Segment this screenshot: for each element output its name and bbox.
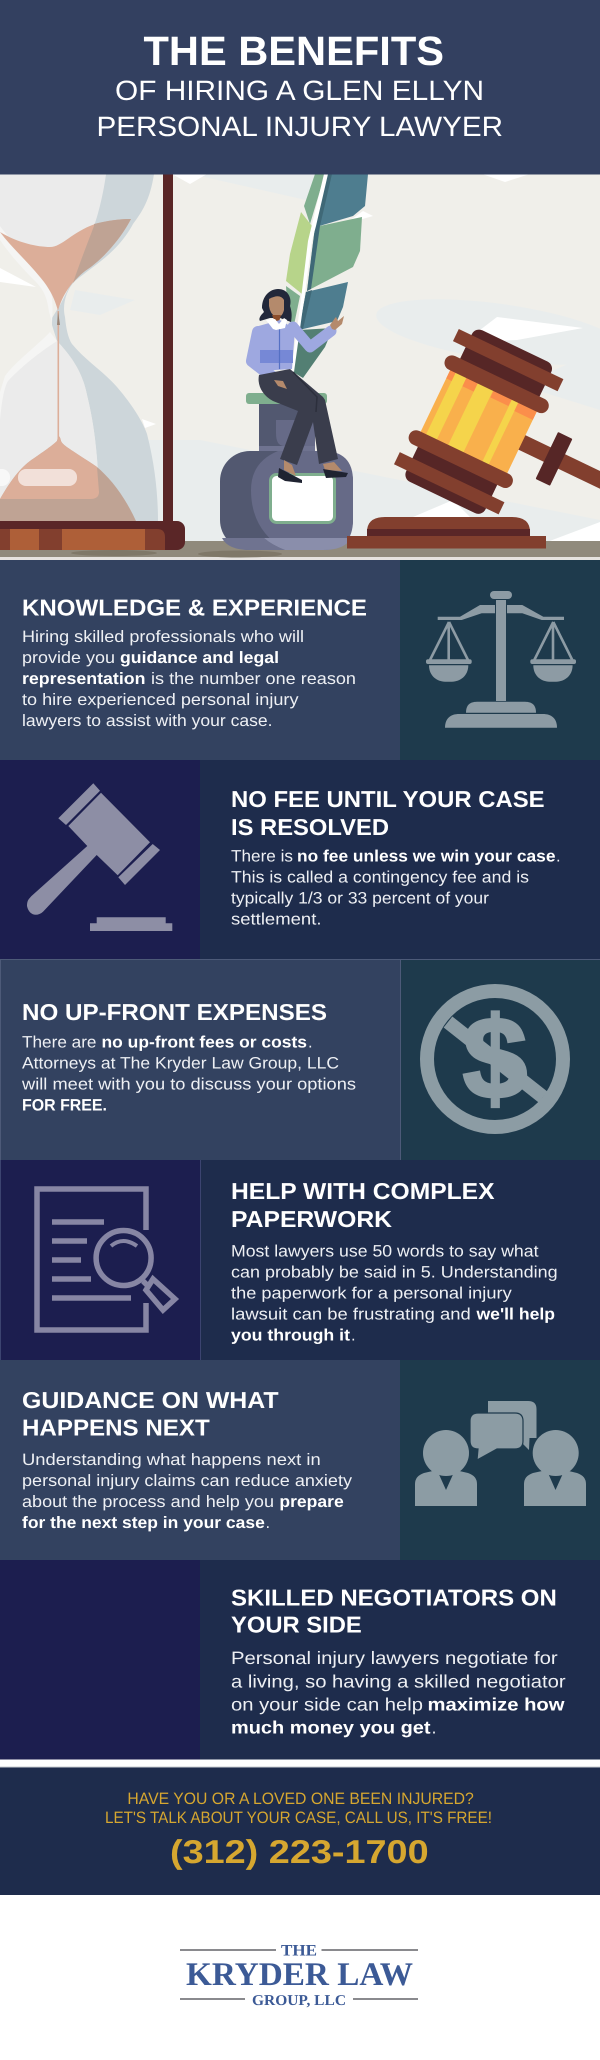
heading: YOUR SIDE [231,1612,362,1638]
heading: SKILLED NEGOTIATORS ON [231,1585,557,1611]
phone number: (312) 223-1700 [170,1833,429,1870]
body text: Most lawyers use 50 words to say what [231,1243,539,1261]
body text: . [432,1717,437,1737]
wooden gavel [347,321,600,564]
icon: two people talking [415,1401,586,1506]
heading: HELP WITH COMPLEX [231,1178,495,1204]
floor [0,541,600,557]
body text: . [266,1514,270,1532]
body text: maximize how [428,1694,566,1714]
body text: no fee unless we win your case [297,848,556,866]
hourglass top sand [0,219,131,311]
icon: no dollar sign [427,991,563,1127]
body text: guidance and legal [120,649,279,667]
heading: HAPPENS NEXT [22,1415,210,1441]
body text: a living, so having a skilled negotiator [231,1671,566,1691]
body text: . [556,848,561,866]
hourglass frame [163,174,173,524]
heading: PAPERWORK [231,1206,392,1232]
heading [231,1585,557,1638]
body text: can probably be said in 5. Understanding [231,1264,558,1282]
body text: . [351,1327,356,1345]
body text: personal injury claims can reduce anxiety [22,1472,353,1490]
body text: for the next step in your case [22,1514,265,1532]
heading: NO FEE UNTIL YOUR CASE [231,786,545,812]
title: THE BENEFITS [144,28,444,74]
logo: The Kryder Law Group, LLC: GROUP, LLC [252,1993,346,2009]
illustration: hourglass, feather figure and gavel [0,174,600,564]
body text: settlement. [231,911,322,929]
body text: no up-front fees or costs [102,1034,307,1052]
body text: will meet with you to discuss your options [21,1076,356,1094]
body text [21,1034,356,1115]
subtitle line two: PERSONAL INJURY LAWYER [96,111,503,142]
panel: knowledge and experience [0,560,600,760]
body text: There is [231,848,293,866]
body text: . [308,1034,313,1052]
body text: prepare [279,1493,344,1511]
heading [231,1178,495,1232]
heading [22,1387,279,1441]
logo: The Kryder Law Group, LLC: KRYDER LAW [186,1957,413,1993]
feather quill [286,174,373,378]
body text: we'll help [475,1306,555,1324]
body text: Hiring skilled professionals who will [22,628,304,646]
heading: KNOWLEDGE & EXPERIENCE [22,595,367,621]
body text: much money you get [231,1717,431,1737]
body text: representation [22,670,146,688]
heading [231,786,545,840]
body text: typically 1/3 or 33 percent of your [231,890,490,908]
hourglass bottom sand [0,436,136,521]
body text: lawyers to assist with your case. [22,712,272,730]
call to action text [105,1790,492,1827]
call to action text: LET'S TALK ABOUT YOUR CASE, CALL US, IT'S FREE! [105,1809,492,1827]
body text: Attorneys at The Kryder Law Group, LLC [22,1055,339,1073]
heading: NO UP-FRONT EXPENSES [22,999,327,1025]
heading: IS RESOLVED [231,814,389,840]
body text: Personal injury lawyers negotiate for [231,1648,558,1668]
panel: guidance on what happens next [0,1360,600,1560]
icon: document with magnifying glass [37,1189,175,1330]
panel: skilled negotiators on your side [0,1560,600,1760]
panel: no fee until your case is resolved [0,760,600,960]
body text [231,848,561,929]
woman sitting on the ink bottle [252,289,348,483]
body text [22,628,356,730]
body text: is the number one reason [151,670,356,688]
body text: lawsuit can be frustrating and [231,1306,471,1324]
icon: gavel [27,783,172,931]
call to action text: HAVE YOU OR A LOVED ONE BEEN INJURED? [127,1790,474,1808]
logo: The Kryder Law Group, LLC: THE [281,1943,317,1960]
body text [231,1243,558,1345]
hourglass [0,174,185,550]
panel: no up-front expenses [0,960,600,1160]
body text: There are [22,1034,96,1052]
body text: on your side can help [231,1694,423,1714]
call to action banner [0,1766,600,1895]
ink bottle [220,393,353,550]
icon: scales of justice [426,591,576,728]
icon: no dollar sign: $ [463,993,527,1123]
body text: about the process and help you [22,1493,274,1511]
subtitle line one: OF HIRING A GLEN ELLYN [115,75,484,106]
header banner [0,0,600,174]
body text: provide you [22,649,115,667]
body text: This is called a contingency fee and is [231,869,529,887]
body text: to hire experienced personal injury [22,691,299,709]
heading: GUIDANCE ON WHAT [22,1387,279,1413]
body text [231,1648,566,1737]
logo: The Kryder Law Group, LLC [180,1943,418,2009]
body text: Understanding what happens next in [22,1451,321,1469]
body text: FOR FREE. [22,1097,107,1115]
body text: the paperwork for a personal injury [231,1285,513,1303]
body text [22,1451,353,1532]
panel: help with complex paperwork [0,1160,600,1360]
body text: you through it [231,1327,351,1345]
